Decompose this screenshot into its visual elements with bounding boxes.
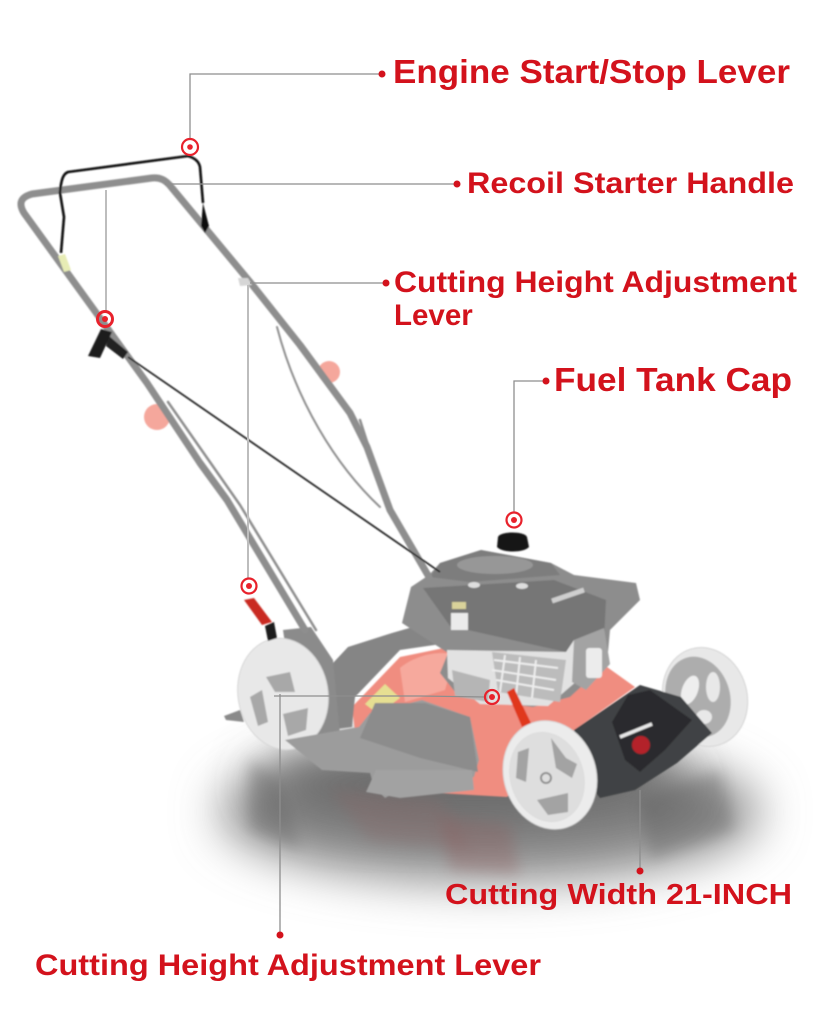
rear right wheel [651, 637, 759, 757]
side handle housing [329, 620, 448, 730]
left rear wheel [224, 627, 340, 757]
handle decal [58, 254, 71, 272]
engine [402, 550, 640, 707]
bail lower clip [201, 203, 209, 233]
ground shadow [220, 742, 760, 882]
label: engine start/stop lever: Engine Start/Stop Lever [393, 54, 790, 91]
recoil cable [128, 357, 440, 572]
engine start stop bail [60, 156, 203, 253]
recoil starter grip [88, 329, 128, 359]
label: cutting height adjustment lever upper: Cutting Height Adjustment [394, 266, 797, 299]
target markers [98, 139, 522, 704]
cutting height lever rear [244, 598, 277, 641]
label: cutting height adjustment lever upper: Lever [394, 299, 473, 332]
label: recoil starter handle: Recoil Starter Handle [467, 167, 794, 200]
label: fuel tank cap: Fuel Tank Cap [554, 361, 792, 398]
black rear guard [574, 685, 712, 798]
fuel tank cap [497, 532, 529, 552]
handle frame [21, 178, 429, 630]
label: cutting height adjustment lever lower: Cutting Height Adjustment Lever [35, 949, 541, 982]
leader end dots [276, 70, 644, 938]
label: cutting width: Cutting Width 21-INCH [445, 879, 792, 911]
height lever pin [238, 278, 252, 286]
mower [21, 156, 759, 842]
callout leader lines [106, 74, 640, 934]
front wheel [489, 708, 611, 842]
grass chute [285, 700, 479, 798]
handle grip clips [144, 361, 340, 430]
side discharge lever [507, 688, 531, 727]
warning decal [365, 684, 400, 714]
cutting deck [352, 648, 635, 797]
